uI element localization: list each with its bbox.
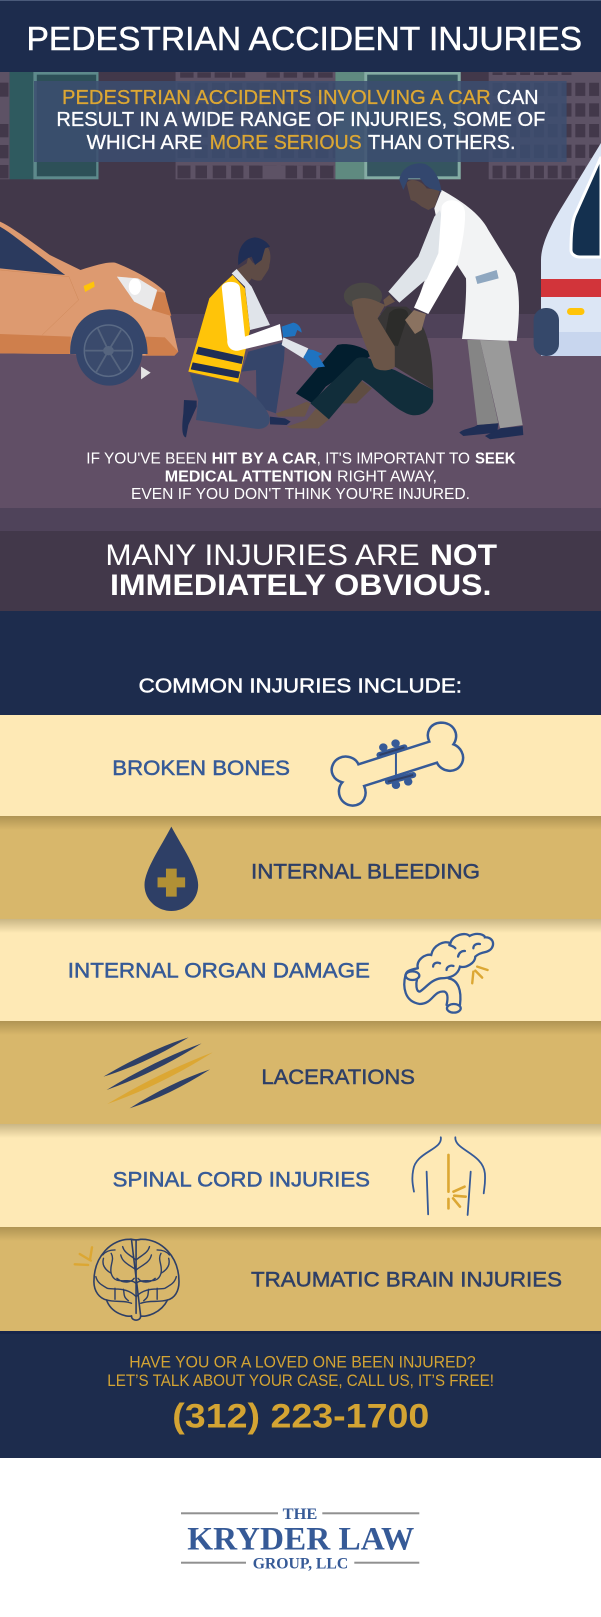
footer call to action xyxy=(0,1331,601,1458)
row: broken bones xyxy=(0,715,601,816)
icon: broken bone xyxy=(332,723,463,806)
row: traumatic brain injuries: TRAUMATIC BRAIN INJURIES xyxy=(251,1269,562,1292)
row: internal organ damage xyxy=(0,919,601,1021)
callout text: MANY INJURIES ARE xyxy=(105,539,420,572)
logo: The Kryder Law Group: KRYDER LAW xyxy=(187,1521,414,1557)
background scene xyxy=(0,72,601,531)
intro text: RESULT IN A WIDE RANGE OF INJURIES, SOME OF xyxy=(56,109,545,131)
logo: The Kryder Law Group xyxy=(181,1506,419,1572)
common injuries heading xyxy=(0,611,601,715)
advice text xyxy=(86,450,516,503)
illustration: doctor in white coat xyxy=(383,163,523,439)
title: PEDESTRIAN ACCIDENT INJURIES xyxy=(26,20,582,57)
row: spinal cord injuries: SPINAL CORD INJURIES xyxy=(113,1169,370,1192)
advice text: RIGHT AWAY, xyxy=(337,469,437,486)
callout text: NOT xyxy=(430,539,497,572)
advice text: , IT'S IMPORTANT TO xyxy=(317,450,470,467)
icon: spine and back xyxy=(412,1137,485,1215)
row: lacerations xyxy=(0,1021,601,1124)
advice text: MEDICAL ATTENTION xyxy=(165,469,332,486)
row: broken bones: BROKEN BONES xyxy=(112,757,290,780)
illustration: seated injured pedestrian xyxy=(276,283,433,428)
header bar xyxy=(0,0,601,72)
callout band xyxy=(0,531,601,611)
row: lacerations: LACERATIONS xyxy=(261,1066,415,1089)
illustration: kneeling medic in yellow vest xyxy=(182,237,325,437)
advice text: EVEN IF YOU DON'T THINK YOU'RE INJURED. xyxy=(131,486,470,503)
advice text: HIT BY A CAR xyxy=(212,450,317,467)
illustration: damaged orange car xyxy=(0,222,178,386)
row: internal bleeding: INTERNAL BLEEDING xyxy=(251,860,480,883)
row: traumatic brain injuries xyxy=(0,1227,601,1331)
intro text: THAN OTHERS. xyxy=(368,132,516,154)
advice text: SEEK xyxy=(475,450,516,467)
intro panel xyxy=(34,81,567,162)
city buildings xyxy=(0,72,601,179)
icon: brain xyxy=(75,1239,179,1320)
advice text: IF YOU'VE BEEN xyxy=(86,450,207,467)
intro text: MORE SERIOUS xyxy=(210,132,362,154)
illustration: ambulance xyxy=(534,143,601,356)
row: internal bleeding xyxy=(0,816,601,919)
intro text: PEDESTRIAN ACCIDENTS INVOLVING A CAR xyxy=(62,87,491,109)
row: spinal cord injuries xyxy=(0,1124,601,1227)
logo: The Kryder Law Group: THE xyxy=(283,1506,317,1523)
icon: intestine xyxy=(404,934,493,1013)
logo: The Kryder Law Group: GROUP, LLC xyxy=(253,1555,348,1572)
intro text xyxy=(56,87,545,154)
row: internal organ damage: INTERNAL ORGAN DAMAGE xyxy=(68,960,370,983)
callout text xyxy=(105,539,497,602)
intro text: CAN xyxy=(497,87,539,109)
intro text: WHICH ARE xyxy=(87,132,202,154)
phone number: (312) 223-1700 xyxy=(172,1397,429,1435)
icon: blood drop xyxy=(145,827,198,911)
footer text line two: LET’S TALK ABOUT YOUR CASE, CALL US, IT’S FREE! xyxy=(107,1372,494,1390)
common injuries heading: COMMON INJURIES INCLUDE: xyxy=(139,675,462,698)
icon: claw scratches xyxy=(103,1037,213,1108)
footer text: HAVE YOU OR A LOVED ONE BEEN INJURED? xyxy=(129,1353,476,1371)
callout text: IMMEDIATELY OBVIOUS. xyxy=(110,569,491,602)
